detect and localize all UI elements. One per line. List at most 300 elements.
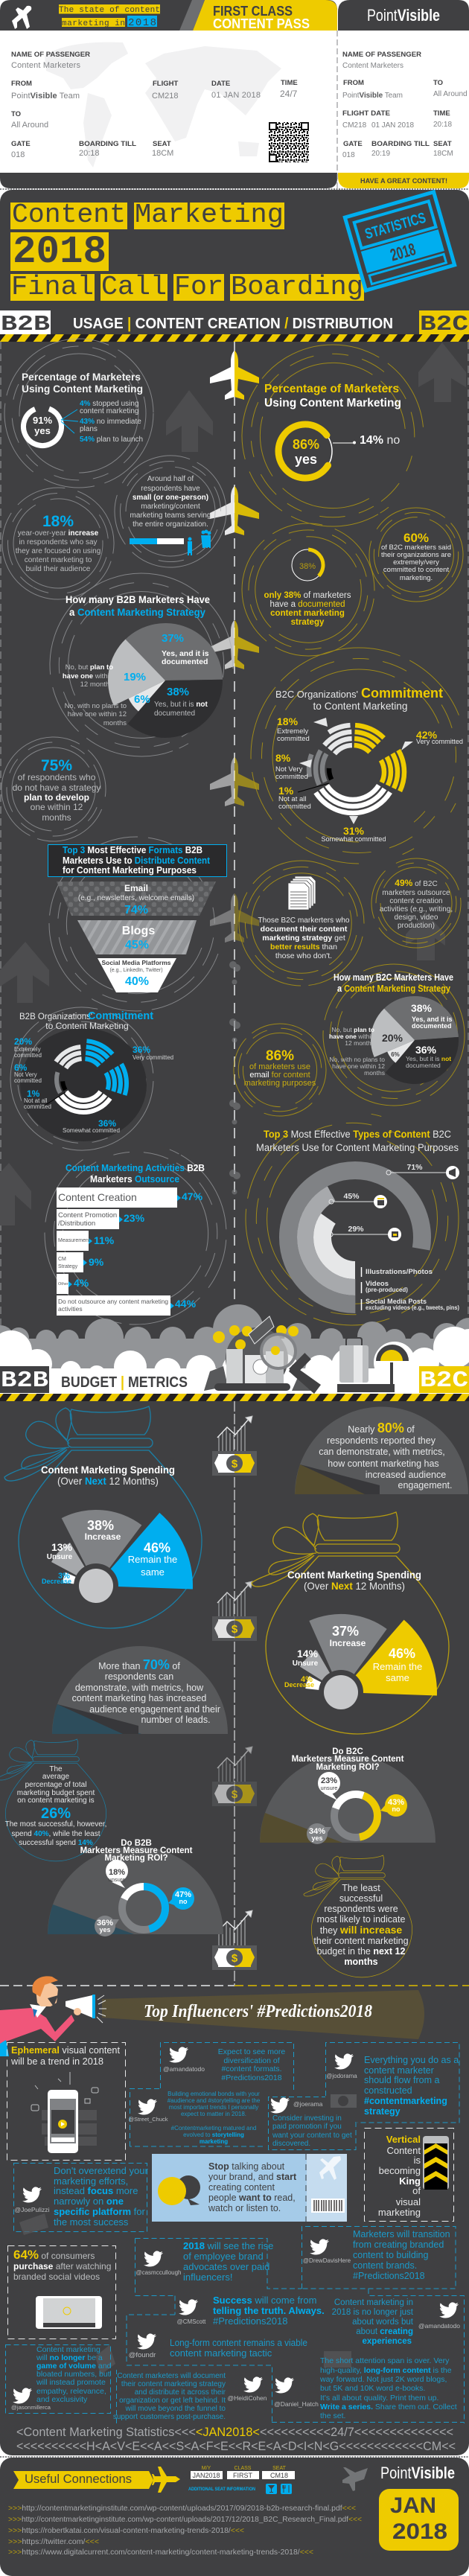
stub values: 018 <box>342 151 355 159</box>
bars: outsourcing: Content Creation <box>58 1191 137 1203</box>
heading: percentage: Percentage of Marketers <box>264 383 399 395</box>
hazard stripe <box>0 334 469 342</box>
heading: B2C commitment: B2C Organizations' <box>275 689 358 700</box>
heading: top 3 types <box>256 1129 459 1153</box>
box: joerama: Consider investing in <box>272 2114 342 2123</box>
box: casmccullough: advocates over paid <box>183 2261 269 2272</box>
heading: B2B commitment: to Content Marketing <box>45 1021 129 1031</box>
top 3 formats box: for Content Marketing Purposes <box>63 865 197 876</box>
seat info <box>188 2466 295 2494</box>
stub fields left: NAME OF PASSENGER <box>11 51 90 59</box>
icon: chevron phone <box>423 2136 449 2190</box>
stat 18%: in respondents who say <box>19 538 98 546</box>
bubble: 23% unsure <box>318 1772 340 1800</box>
box: Street_Chuck <box>128 2089 263 2146</box>
title <box>10 200 364 302</box>
top 3 formats box: Top 3 Most Effective Formats B2B <box>63 845 202 855</box>
box: Daniel_Hatch: The short attention span is over. Very <box>320 2356 450 2365</box>
labels: B2B radial: Not Very <box>14 1071 37 1078</box>
heading: how many B2B <box>66 593 210 618</box>
small money bag stat: percentage of total <box>25 1781 86 1789</box>
stub fields left: BOARDING TILL <box>371 140 430 148</box>
logo: PointVisible <box>380 2464 455 2482</box>
pie: spending B2B: 3% <box>58 1572 70 1581</box>
heading: top 3 types: Marketers Use for Content Marketing Purposes <box>256 1142 459 1153</box>
pie: strategy B2C: 12 months <box>345 1039 374 1047</box>
heading: B2B commitment: B2B Organizations' <box>19 1013 92 1021</box>
box: HeidiCohen: @HeidiCohen <box>227 2394 267 2402</box>
pie: spending B2B: 38% <box>87 1518 114 1533</box>
section header: usage <box>0 310 469 342</box>
boarding ticket callout <box>152 2154 347 2222</box>
seat info: JAN2018 <box>192 2472 220 2479</box>
small money bag stat: marketing budget spent <box>17 1789 95 1797</box>
box: JoePulizzi: narrowly on one <box>54 2196 124 2207</box>
small money bag stat <box>0 1739 106 1861</box>
pie: strategy B2B: have one within 12 <box>68 710 127 718</box>
box: vertical: visual <box>396 2196 421 2207</box>
pie: strategy B2C: 20% <box>382 1032 403 1044</box>
stub values: 01 JAN 2018 <box>211 91 261 100</box>
stat 75%: 75% <box>41 757 72 774</box>
icon: tablet <box>36 2296 102 2329</box>
stat 75%: of respondents who <box>18 772 96 782</box>
dome: 70% <box>52 1646 228 1734</box>
labels: B2C radial: committed <box>277 735 310 743</box>
title line: Final Call For Boarding: Boarding <box>231 272 363 302</box>
box: jodorama: @jodorama <box>326 2073 357 2079</box>
funnel: email: (e.g., newsletters, welcome emails) <box>78 894 194 902</box>
box: joerama: want your content to get <box>272 2132 352 2140</box>
labels: B2B radial: 6% <box>14 1062 28 1073</box>
stub fields left: DATE <box>211 80 230 88</box>
white clouds <box>0 1327 469 1394</box>
pie: strategy B2B: Yes, and it is <box>162 649 209 658</box>
legend: top 3 types <box>362 1267 459 1311</box>
box: DrewDavisHere: from creating branded <box>353 2239 444 2250</box>
links: >>>https://twitter.com/ <<< <box>8 2538 99 2546</box>
plane icon <box>12 6 31 29</box>
statistics stamp: STATISTICS <box>363 210 428 243</box>
pie: spending B2C: Increase <box>330 1638 366 1648</box>
box: Street_Chuck: most important trends I personally <box>169 2104 258 2111</box>
bubble: 36% yes <box>95 1916 119 1936</box>
bubble: 47% no <box>168 1887 194 1910</box>
box: jasonmillerca <box>6 2345 112 2414</box>
section title: BUDGET | METRICS <box>61 1374 188 1391</box>
box: jodorama: #contentmarketing <box>364 2096 447 2106</box>
box: JoePulizzi: @JoePulizzi <box>15 2206 50 2213</box>
labels: B2B radial: 36% <box>133 1045 150 1055</box>
pie: strategy B2B: 19% <box>124 671 146 683</box>
box: amandatodo second: 2018 is no longer just <box>332 2308 414 2317</box>
money bag outline <box>4 1406 202 1628</box>
box: ephemeral <box>7 2043 125 2161</box>
heading: B2C commitment: to Content Marketing <box>313 700 408 712</box>
stat 49%: content creation <box>389 897 443 905</box>
dome: 80%: engagement. <box>398 1480 452 1491</box>
box: Street_Chuck: #Contentmarketing matured and <box>171 2125 256 2132</box>
tagline: 2018 <box>128 17 156 29</box>
dome: B2C ROI: Do B2C <box>332 1747 363 1756</box>
section title: USAGE | CONTENT CREATION / DISTRIBUTION <box>73 316 393 332</box>
box: HeidiCohen: support customers post-purchase. <box>113 2413 226 2421</box>
funnel: social: (e.g., LinkedIn, Twitter) <box>109 968 163 973</box>
small money bag stat: on content marketing is <box>17 1796 95 1805</box>
funnel: social: Social Media Platforms <box>101 959 171 966</box>
radial chart B2B <box>20 1028 147 1141</box>
bubble: 34% yes: yes <box>311 1834 323 1842</box>
small money bag stat: most likely to indicate <box>317 1914 405 1925</box>
pie: spending B2B: 46% <box>144 1540 170 1555</box>
icon: credit card <box>249 1316 274 1344</box>
box: joerama <box>268 2094 357 2150</box>
box: jasonmillerca: empathy, relevance, <box>36 2387 106 2396</box>
labels: B2C radial: 31% <box>343 825 365 837</box>
boarding ticket callout: people want to read, <box>208 2193 296 2203</box>
dome: 80%: increased audience <box>366 1470 446 1480</box>
radial bars: top 3 types: 29% <box>348 1225 364 1234</box>
labels: B2C radial <box>275 715 463 844</box>
B2B tile: B2B <box>1 1368 48 1394</box>
bubble: 18% unsure: unsure <box>109 1876 125 1883</box>
icon: baggage scale <box>337 1338 409 1392</box>
pie: strategy B2C: 6% <box>391 1051 400 1058</box>
heading: percentage: Using Content Marketing <box>264 397 401 409</box>
bars: outsourcing: Other <box>58 1282 68 1287</box>
stat 18%: content marketing to <box>25 556 92 564</box>
stub values: 018 <box>11 150 25 159</box>
pie: spending B2C: Remain the <box>373 1661 422 1672</box>
icon: conveyor <box>214 1383 290 1391</box>
box: jodorama <box>326 2043 459 2123</box>
stat 18%: they are focused on using <box>16 547 100 555</box>
icon: yellow plane <box>152 2467 180 2493</box>
icons: drink and meal <box>266 2484 292 2494</box>
box: amandatodo: diversification of <box>223 2056 280 2065</box>
bars: outsourcing: 4% <box>74 1277 89 1289</box>
box: Daniel_Hatch: Write a series. Share them out. Collect <box>320 2403 457 2411</box>
bubble: 47% no: no <box>179 1898 188 1905</box>
stub fields left: TO <box>433 79 443 87</box>
pie: strategy B2C: 36% <box>415 1044 437 1056</box>
megaphone beam <box>102 1990 424 2039</box>
box: DrewDavisHere: content brands. <box>353 2260 417 2271</box>
stub values: 20:18 <box>433 121 452 129</box>
stat 49%: 49% of B2C <box>395 878 438 888</box>
bars: outsourcing: 44% <box>175 1298 197 1310</box>
links: >>>https://robertkatai.com/visual-content-marketing-trends-2018/ <<< <box>8 2527 244 2535</box>
dome: B2B ROI: Marketing ROI? <box>105 1854 168 1863</box>
labels: B2B radial: Extremely <box>14 1046 41 1053</box>
box: joerama: @joerama <box>293 2100 323 2108</box>
box: Daniel_Hatch: but 5K and 10K word e-books. <box>320 2384 425 2393</box>
stub values: PointVisible Team <box>11 92 80 101</box>
pie: strategy B2B: No, with no plans to <box>65 702 127 710</box>
heading: how many B2B: How many B2B Marketers Have <box>66 593 210 605</box>
pie: spending B2C: Unsure <box>293 1660 319 1668</box>
labels: B2C radial: 1% <box>278 785 294 797</box>
heading: percentage of marketers <box>22 371 143 395</box>
text: documented strategy: only 38% of marketers <box>264 591 351 600</box>
box: casmccullough: of employee brand <box>183 2251 264 2262</box>
bars: outsourcing: 11% <box>94 1234 115 1246</box>
seat info: FIRST <box>233 2472 253 2479</box>
small money bag stat: budget in the next 12 <box>317 1946 405 1957</box>
dollar bills with charts: $ <box>232 1623 238 1636</box>
stat 86% email: 86% <box>266 1048 294 1064</box>
icon: money pile <box>204 1327 314 1391</box>
bars: outsourcing: Strategy <box>58 1264 78 1269</box>
box: ephemeral: Ephemeral visual content <box>11 2044 120 2056</box>
seat info: M/Y <box>202 2466 211 2471</box>
pie: strategy B2C: Yes, but it is not <box>406 1055 451 1062</box>
icon: documents <box>288 876 316 910</box>
donut breakdown: 43% no immediate <box>80 418 141 426</box>
logo: PointVisible <box>367 6 440 25</box>
stat 75%: do not have a strategy <box>13 782 100 793</box>
small money bag stat <box>304 1855 412 1977</box>
small money bag stat: average <box>42 1773 70 1781</box>
dollar bills with charts: $ <box>232 1788 238 1801</box>
small money bag stat: respondents were <box>324 1904 398 1914</box>
footer panel <box>0 2458 469 2576</box>
box: 64%: purchase after watching <box>13 2261 111 2271</box>
ribbon: useful connections <box>13 2471 153 2489</box>
box: HeidiCohen: organization or get left behind. It <box>119 2397 226 2405</box>
legend: top 3 types: (pre-produced) <box>366 1287 408 1293</box>
section header: budget <box>0 1366 469 1401</box>
stub values: CM218 <box>152 92 178 101</box>
dome: B2B ROI: Marketers Measure Content <box>80 1846 193 1855</box>
B2C tile: B2C <box>420 1368 468 1394</box>
box: Street_Chuck: marketing <box>200 2138 228 2145</box>
header gray stripe <box>179 0 205 31</box>
stat 18% <box>16 513 100 573</box>
statistics stamp <box>345 192 455 290</box>
box: vertical: marketing <box>378 2207 421 2218</box>
text: documenting results: Those B2C markerters who <box>258 916 350 925</box>
heading: spending: Content Marketing Spending <box>287 1569 421 1581</box>
box: JoePulizzi: marketing efforts, <box>54 2175 128 2187</box>
envelope watermarks <box>95 2345 351 2375</box>
radial bars: top 3 types: 45% <box>343 1192 360 1201</box>
title line: Final Call For Boarding <box>10 272 364 302</box>
box: CMScott: @CMScott <box>177 2318 206 2325</box>
dome: B2C ROI <box>260 1747 436 1844</box>
stub fields left: SEAT <box>153 140 171 148</box>
pie: strategy B2C <box>329 996 459 1084</box>
labels: B2B radial: Very committed <box>133 1054 173 1061</box>
labels: B2B radial: 1% <box>27 1088 40 1099</box>
divider dashed yellow <box>234 1985 469 1986</box>
stat 18%: year-over-year increase <box>18 529 99 538</box>
first class heading: FIRST CLASS <box>213 4 293 19</box>
box: vertical: King <box>399 2175 421 2187</box>
donut breakdown: 4% stopped using <box>80 400 139 408</box>
legend: top 3 types: Videos <box>366 1280 389 1288</box>
donut 86% <box>268 414 400 488</box>
pie: strategy B2B: 6% <box>134 693 150 706</box>
bars: outsourcing: CM <box>58 1257 66 1262</box>
text: documenting results <box>258 916 350 960</box>
dollar bills with charts: $ <box>232 1952 238 1965</box>
funnel <box>57 881 216 992</box>
pie: spending B2C: 4% <box>301 1675 313 1684</box>
stub values: All Around <box>11 121 48 130</box>
box: HeidiCohen: Content marketers will document <box>117 2372 226 2380</box>
pie: strategy B2B: documented <box>162 657 208 666</box>
radial bars: top 3 types <box>288 1163 459 1304</box>
box: CMScott: telling the truth. Always. <box>213 2305 325 2316</box>
stub fields left: NAME OF PASSENGER <box>342 51 421 59</box>
text: documented strategy: content marketing <box>270 609 345 618</box>
heading: outsourcing <box>66 1162 205 1185</box>
radial chart B2C <box>298 718 413 824</box>
box: Daniel_Hatch <box>272 2356 464 2423</box>
stub values: All Around <box>433 90 468 98</box>
icon: social bubbles <box>31 2072 98 2111</box>
bubble: 34% yes <box>307 1823 331 1844</box>
perforation bottom <box>0 2456 469 2458</box>
donut 91% <box>18 402 78 451</box>
box: vertical: becoming <box>379 2165 421 2176</box>
dollar bills with charts: $ <box>232 1458 238 1470</box>
labels: B2B radial: 20% <box>14 1036 32 1047</box>
pie: strategy B2C: have one within <box>329 1033 374 1040</box>
donut 91%: 91% <box>33 415 52 426</box>
text: documented strategy <box>264 591 351 627</box>
donut 86%: yes <box>295 452 317 467</box>
world map <box>45 42 281 168</box>
ribbon: useful connections: Useful Connections <box>25 2472 132 2486</box>
stub values <box>11 61 468 159</box>
bars: outsourcing: activities <box>58 1305 83 1313</box>
bars: outsourcing: Do not outsource any content marketing <box>58 1298 168 1305</box>
title line: Content Marketing: Marketing <box>135 200 284 230</box>
stat 60%: committed to content <box>383 566 449 574</box>
box: amandatodo <box>161 2043 293 2092</box>
stat 18%: 18% <box>42 513 74 530</box>
stub greeting: HAVE A GREAT CONTENT! <box>360 177 447 185</box>
box: joerama: paid promotion if you <box>272 2123 342 2131</box>
top 3 formats box: Marketers Use to Distribute Content <box>63 855 211 866</box>
funnel: blogs: 45% <box>125 939 149 951</box>
bubble: 36% yes: 36% <box>97 1919 113 1928</box>
heading: spending <box>287 1569 421 1592</box>
box: DrewDavisHere <box>302 2226 456 2289</box>
labels: B2B radial: 36% <box>98 1118 116 1129</box>
box: Street_Chuck: #audience and #storytelling are the <box>168 2097 261 2104</box>
small money bag stat: 26% <box>41 1805 71 1822</box>
labels: B2C radial: Not Very <box>275 765 303 774</box>
heading: percentage of marketers: Percentage of Marketers <box>22 371 141 383</box>
bubble: 18% unsure: 18% <box>109 1868 125 1877</box>
stat 60%: marketing. <box>400 574 433 582</box>
box: Street_Chuck: @Street_Chuck <box>128 2116 168 2123</box>
title line: Final Call For Boarding: For <box>174 272 223 302</box>
bars: outsourcing: Measurement <box>58 1238 90 1243</box>
box: Daniel_Hatch: @Daniel_Hatch <box>274 2400 319 2408</box>
box: CMScott: Success will come from <box>213 2295 316 2306</box>
stat 49%: marketers outsource <box>382 889 450 897</box>
stub fields left: SEAT <box>433 140 452 148</box>
box: Street_Chuck: Building emotional bonds with your <box>168 2091 260 2097</box>
box: Daniel_Hatch: way forward. Not just 2K word blogs, <box>319 2375 447 2384</box>
box: jasonmillerca: will no longer be a <box>36 2353 103 2362</box>
heading: percentage <box>264 383 401 409</box>
links: >>>https://www.digitalcurrent.com/content-marketing/content-marketing-trends-2018/ <<< <box>8 2548 313 2557</box>
dome: 80%: respondents reported they <box>327 1435 436 1446</box>
stat 75% <box>13 757 100 823</box>
pie: spending B2C: Decrease <box>284 1681 314 1689</box>
planes along the runway <box>210 351 259 943</box>
box: jasonmillerca: @jasonmillerca <box>11 2404 51 2411</box>
box: DrewDavisHere: Marketers will transition <box>353 2229 450 2239</box>
pie: strategy B2C: No, with no plans to <box>329 1056 385 1063</box>
box: jasonmillerca: bloated numbers, but <box>36 2370 110 2379</box>
icon: gray plane <box>342 2467 368 2491</box>
pie: spending B2C: 14% <box>297 1648 319 1660</box>
bubble: 43% no: no <box>392 1805 401 1813</box>
pie: spending B2B: Decrease <box>42 1578 71 1585</box>
heading: how many B2C: How many B2C Marketers Have <box>334 972 453 983</box>
bubble: 23% unsure: unsure <box>321 1785 337 1791</box>
labels: B2C radial: Somewhat committed <box>322 835 386 844</box>
labels: B2B radial: committed <box>14 1052 42 1059</box>
box: casmccullough: @casmccullough <box>135 2269 182 2276</box>
dome: 70%: demonstrate, with metrics, how <box>75 1683 204 1693</box>
stat 86% email: marketing purposes <box>244 1079 316 1088</box>
dome: 70%: number of leads. <box>141 1715 211 1725</box>
donut: B2C ROI <box>334 1794 377 1837</box>
text: documenting results: document their content <box>261 925 348 934</box>
text: documenting results: those who don't. <box>275 951 332 960</box>
funnel: social: 40% <box>125 975 149 988</box>
heading: spending: (Over Next 12 Months) <box>57 1475 159 1487</box>
date badge: JAN <box>390 2493 436 2518</box>
box: amandatodo second: about words but <box>352 2318 414 2327</box>
stub fields left: TO <box>11 110 21 118</box>
box: JoePulizzi: the most success <box>54 2216 129 2228</box>
heading: spending <box>41 1464 175 1487</box>
pie: spending B2B: Remain the <box>128 1554 177 1565</box>
icon: magnifier <box>261 1334 321 1394</box>
pie: strategy B2B: 12 months <box>80 680 113 689</box>
box: HeidiCohen: and distribute it across their <box>135 2388 226 2397</box>
B2C tile: B2C <box>420 312 468 337</box>
stub values: 18CM <box>433 150 453 158</box>
stat 60%: 60% <box>403 531 429 545</box>
box: foundr <box>129 2333 307 2359</box>
donut 91%: yes <box>34 425 51 436</box>
bars: outsourcing: 23% <box>124 1212 145 1224</box>
small money bag stat: The least <box>342 1883 380 1893</box>
stat 60% <box>381 531 451 582</box>
box: foundr: content marketing tactic <box>170 2347 272 2359</box>
bubble: 36% yes: yes <box>99 1926 111 1933</box>
bars: outsourcing: Content Promotion <box>58 1211 117 1220</box>
small money bag stat: successful <box>339 1893 383 1904</box>
heading: outsourcing: Marketers Outsource <box>90 1173 179 1185</box>
box: amandatodo: @amandatodo <box>163 2065 205 2073</box>
legend: top 3 types: Social Media Posts <box>366 1298 427 1306</box>
bars: outsourcing <box>57 1187 203 1316</box>
pie: strategy B2B: have one within <box>63 672 113 680</box>
small money bag stat: spend 40%, while the least <box>12 1830 100 1838</box>
dome: 70%: More than 70% of <box>98 1657 180 1672</box>
donut 86%: 14% no <box>360 434 400 447</box>
